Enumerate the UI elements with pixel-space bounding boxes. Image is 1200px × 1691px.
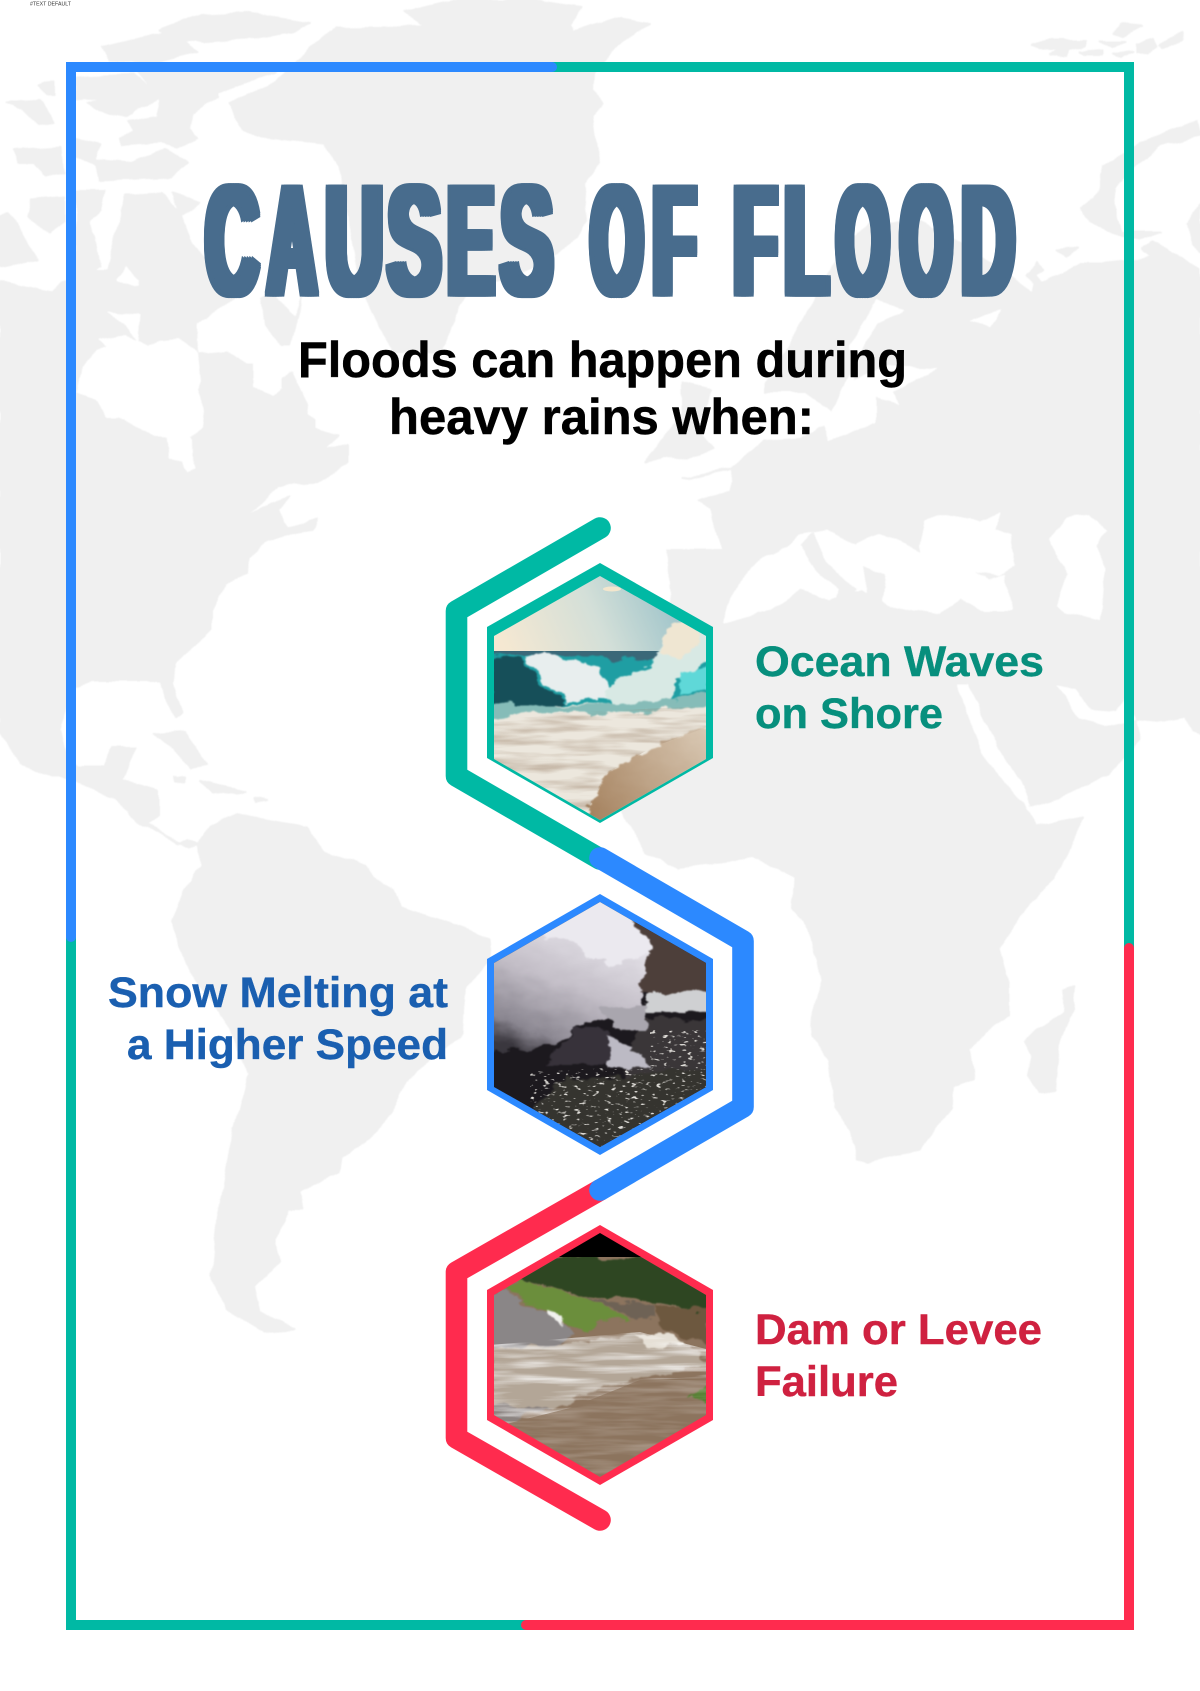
label: dam failure: Dam or Levee — [755, 1306, 1042, 1354]
title: A — [268, 153, 316, 329]
subtitle — [298, 332, 907, 445]
label: ocean waves: Ocean Waves — [755, 638, 1044, 686]
tiny default label: #TEXT DEFAULT — [30, 2, 72, 8]
label: snow melting: Snow Melting at — [108, 969, 448, 1017]
label: snow melting — [108, 969, 448, 1069]
blue path — [600, 858, 743, 1190]
background: world map — [0, 0, 1200, 1332]
title — [204, 153, 1016, 329]
title: C — [206, 153, 257, 329]
title: O — [837, 153, 889, 329]
label: dam failure: Failure — [755, 1358, 898, 1406]
title: U — [326, 153, 382, 329]
title: L — [785, 153, 828, 329]
subtitle: heavy rains when: — [389, 389, 814, 445]
label: snow melting: a Higher Speed — [127, 1021, 448, 1069]
connector: hexagon path — [456, 528, 743, 1520]
teal path — [456, 528, 600, 859]
title: F — [734, 153, 777, 329]
photo hexagon: dam failure — [487, 1225, 713, 1485]
title: E — [448, 153, 494, 329]
title: O — [901, 153, 951, 329]
label: ocean waves: on Shore — [755, 690, 943, 738]
title: S — [388, 153, 441, 329]
title: F — [653, 153, 696, 329]
title: O — [591, 153, 643, 329]
title: S — [501, 153, 553, 329]
red path — [456, 1190, 600, 1520]
title: D — [962, 153, 1014, 329]
subtitle: Floods can happen during — [298, 332, 907, 388]
photo hexagon: melting snow — [480, 890, 713, 1155]
label: ocean waves — [755, 638, 1044, 738]
photo hexagon: ocean waves — [487, 563, 713, 830]
label: dam failure — [755, 1306, 1042, 1406]
